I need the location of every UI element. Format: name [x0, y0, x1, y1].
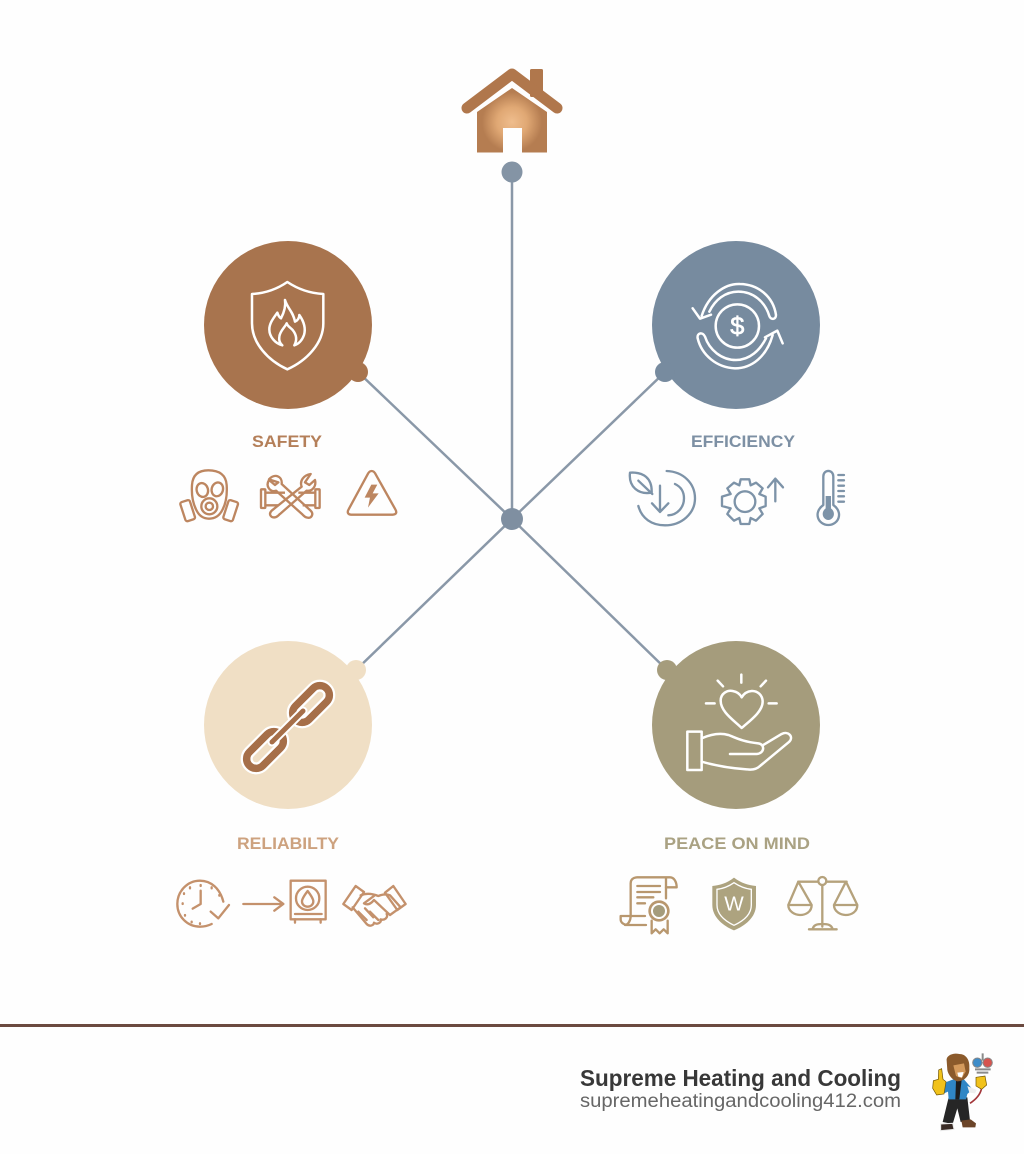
icon: heart over open hand [687, 675, 791, 770]
panel: efficiency [630, 241, 844, 525]
icon: dollar with cycle arrows: $ [730, 313, 744, 341]
reliability circle [204, 641, 372, 809]
heading: reliability: RELIABILTY [237, 834, 340, 853]
mascot gauges [973, 1053, 992, 1073]
icon: dollar with cycle arrows [693, 284, 783, 368]
mascot hose [970, 1089, 981, 1103]
icon: warranty shield: W [724, 892, 744, 915]
icon: certificate scroll [621, 877, 677, 933]
icon: handshake [343, 886, 406, 926]
efficiency circle [652, 241, 820, 409]
icon: gas mask [180, 470, 239, 522]
mascot right glove [976, 1076, 987, 1089]
icon: house [467, 69, 557, 152]
panel: reliability [177, 641, 406, 927]
heading: safety: SAFETY [252, 432, 323, 451]
icon: electric hazard triangle [348, 471, 396, 515]
icon: chain links [243, 682, 333, 772]
icon: leaf with downward arrow [630, 471, 695, 525]
peace circle [652, 641, 820, 809]
footer brand text: supremeheatingandcooling412.com [580, 1091, 901, 1112]
safety circle [204, 241, 372, 409]
central hub node [501, 508, 523, 530]
mascot shoes [941, 1119, 976, 1131]
mascot shirt [944, 1079, 973, 1099]
connector lines [356, 172, 667, 670]
icon: gear with upward arrow [722, 479, 783, 524]
icon: shield with flame [252, 282, 323, 369]
arrow: clock to boiler [243, 897, 283, 911]
mascot trousers [943, 1097, 970, 1124]
footer brand text [580, 1065, 901, 1112]
mascot face [953, 1063, 966, 1078]
heading: peace on mind: PEACE ON MIND [664, 834, 810, 853]
panel: peace of mind [621, 641, 857, 933]
footer brand text: Supreme Heating and Cooling [580, 1065, 901, 1091]
icon: warranty shield [712, 878, 756, 930]
icon: clock with check [177, 881, 229, 927]
icon: crossed wrenches and pipe [261, 474, 320, 518]
heading: efficiency: EFFICIENCY [691, 432, 796, 451]
icon: thermometer [818, 471, 844, 525]
mascot left glove [933, 1069, 946, 1095]
icon: balance scales [788, 877, 857, 929]
mascot mane [947, 1054, 969, 1081]
icon: lion mascot [933, 1053, 992, 1131]
panel: safety [180, 241, 396, 522]
top node [502, 162, 522, 182]
footer divider [0, 1024, 1024, 1027]
icon: boiler unit [291, 881, 326, 923]
